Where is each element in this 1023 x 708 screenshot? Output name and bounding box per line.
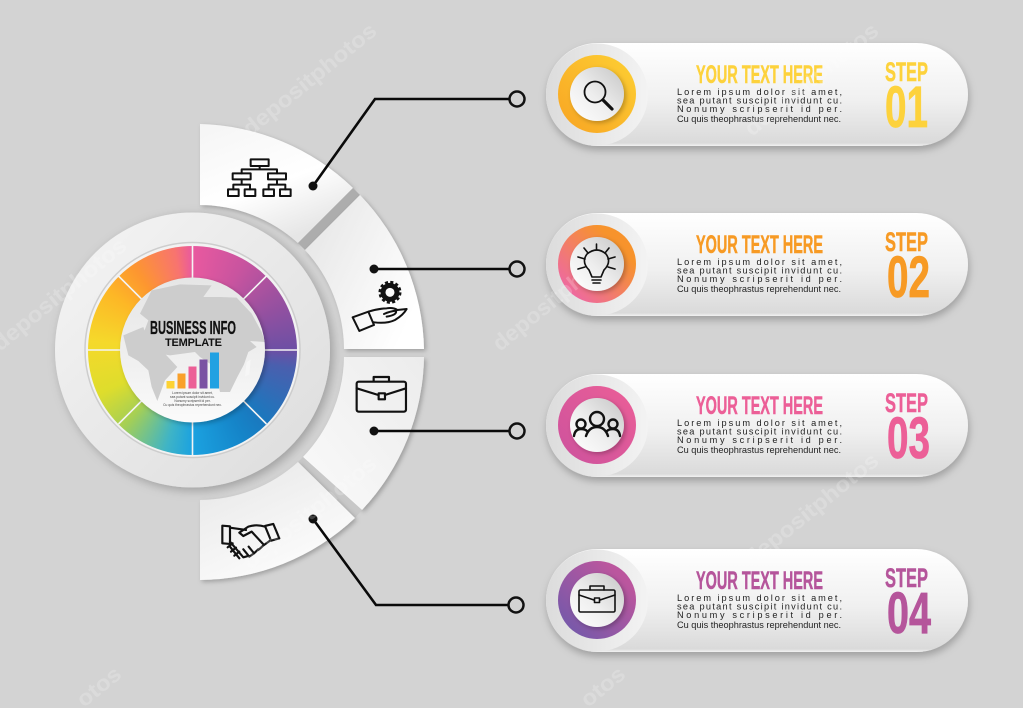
body text: Nonumy scripserit id per. bbox=[677, 610, 842, 620]
globe small text: Cu quis theophrastus reprehendunt nec. bbox=[163, 403, 222, 407]
step label: STEP bbox=[885, 563, 928, 593]
body text bbox=[677, 418, 842, 455]
body text: sea putant suscipit invidunt cu. bbox=[677, 266, 842, 276]
panel: step 2 bbox=[546, 213, 968, 316]
body text: Cu quis theophrastus reprehendunt nec. bbox=[677, 620, 841, 630]
body text: Nonumy scripserit id per. bbox=[677, 274, 842, 284]
watermarks: depositphotos bbox=[237, 18, 381, 141]
title bbox=[150, 317, 236, 349]
main circle: inner groove bbox=[85, 242, 300, 458]
body text bbox=[677, 593, 842, 630]
fan segment gap: lower bbox=[298, 457, 362, 518]
body text: Cu quis theophrastus reprehendunt nec. bbox=[677, 114, 841, 124]
connector: step 3 bbox=[370, 424, 524, 438]
icon: handshake bbox=[222, 524, 279, 558]
step label: STEP bbox=[885, 57, 928, 87]
body text: sea putant suscipit invidunt cu. bbox=[677, 426, 842, 436]
mini bar chart bbox=[166, 352, 219, 388]
heading: YOUR TEXT HERE bbox=[696, 61, 823, 89]
icon: briefcase bbox=[357, 377, 406, 412]
globe small text bbox=[163, 391, 222, 407]
body text: Nonumy scripserit id per. bbox=[677, 104, 842, 114]
body text: Nonumy scripserit id per. bbox=[677, 435, 842, 445]
globe small text: sea putant suscipit invidunt cu. bbox=[170, 395, 215, 399]
world map bbox=[123, 284, 265, 401]
fan segment: organisation chart bbox=[200, 124, 353, 243]
main circle: outer disc bbox=[55, 212, 330, 488]
icon: magnifier bbox=[584, 82, 612, 109]
body text: sea putant suscipit invidunt cu. bbox=[677, 602, 842, 612]
fan segment: gear and hand bbox=[305, 195, 424, 349]
step number: 03 bbox=[887, 406, 930, 471]
title: BUSINESS INFO bbox=[150, 317, 236, 338]
body text: Lorem ipsum dolor sit amet, bbox=[677, 87, 842, 97]
panel: step 3 bbox=[546, 374, 968, 477]
colour wheel separators bbox=[88, 245, 297, 456]
heading: YOUR TEXT HERE bbox=[696, 567, 823, 595]
icon: briefcase small bbox=[579, 586, 615, 612]
body text: Lorem ipsum dolor sit amet, bbox=[677, 257, 842, 267]
body text bbox=[677, 87, 842, 124]
fan segment gap: upper bbox=[298, 188, 360, 250]
fan segment: handshake bbox=[200, 462, 355, 580]
panel: step 1 bbox=[546, 43, 968, 146]
body text: Cu quis theophrastus reprehendunt nec. bbox=[677, 445, 841, 455]
step label: STEP bbox=[885, 227, 928, 257]
icon: light bulb bbox=[578, 244, 615, 283]
body text: Lorem ipsum dolor sit amet, bbox=[677, 418, 842, 428]
globe small text: Nonumy scripserit id per. bbox=[174, 399, 211, 403]
body text: sea putant suscipit invidunt cu. bbox=[677, 96, 842, 106]
step number: 04 bbox=[887, 581, 931, 646]
panel: step 4 bbox=[546, 549, 968, 652]
globe panel bbox=[120, 278, 265, 422]
step number: 02 bbox=[887, 245, 930, 310]
step number: 01 bbox=[885, 75, 928, 140]
subtitle: TEMPLATE bbox=[165, 337, 222, 349]
icon: organisation chart bbox=[228, 159, 291, 196]
body text: Lorem ipsum dolor sit amet, bbox=[677, 593, 842, 603]
watermarks: depositph bbox=[487, 267, 589, 356]
globe small text: Lorem ipsum dolor sit amet, bbox=[172, 391, 213, 395]
icon: team bbox=[574, 412, 620, 436]
connector: step 4 bbox=[308, 514, 524, 612]
heading: YOUR TEXT HERE bbox=[696, 392, 823, 420]
colour wheel bbox=[88, 246, 297, 454]
watermarks: depositphotos bbox=[237, 451, 381, 574]
body text bbox=[677, 257, 842, 294]
heading: YOUR TEXT HERE bbox=[696, 231, 823, 259]
fan segment: briefcase bbox=[303, 357, 424, 510]
connector: step 2 bbox=[370, 262, 524, 276]
watermarks: depositphotos bbox=[739, 18, 883, 141]
step label: STEP bbox=[885, 388, 928, 418]
body text: Cu quis theophrastus reprehendunt nec. bbox=[677, 284, 841, 294]
icon: gear in hand bbox=[353, 282, 407, 331]
connector: step 1 bbox=[308, 92, 524, 190]
watermarks: depositphotos bbox=[739, 448, 883, 571]
